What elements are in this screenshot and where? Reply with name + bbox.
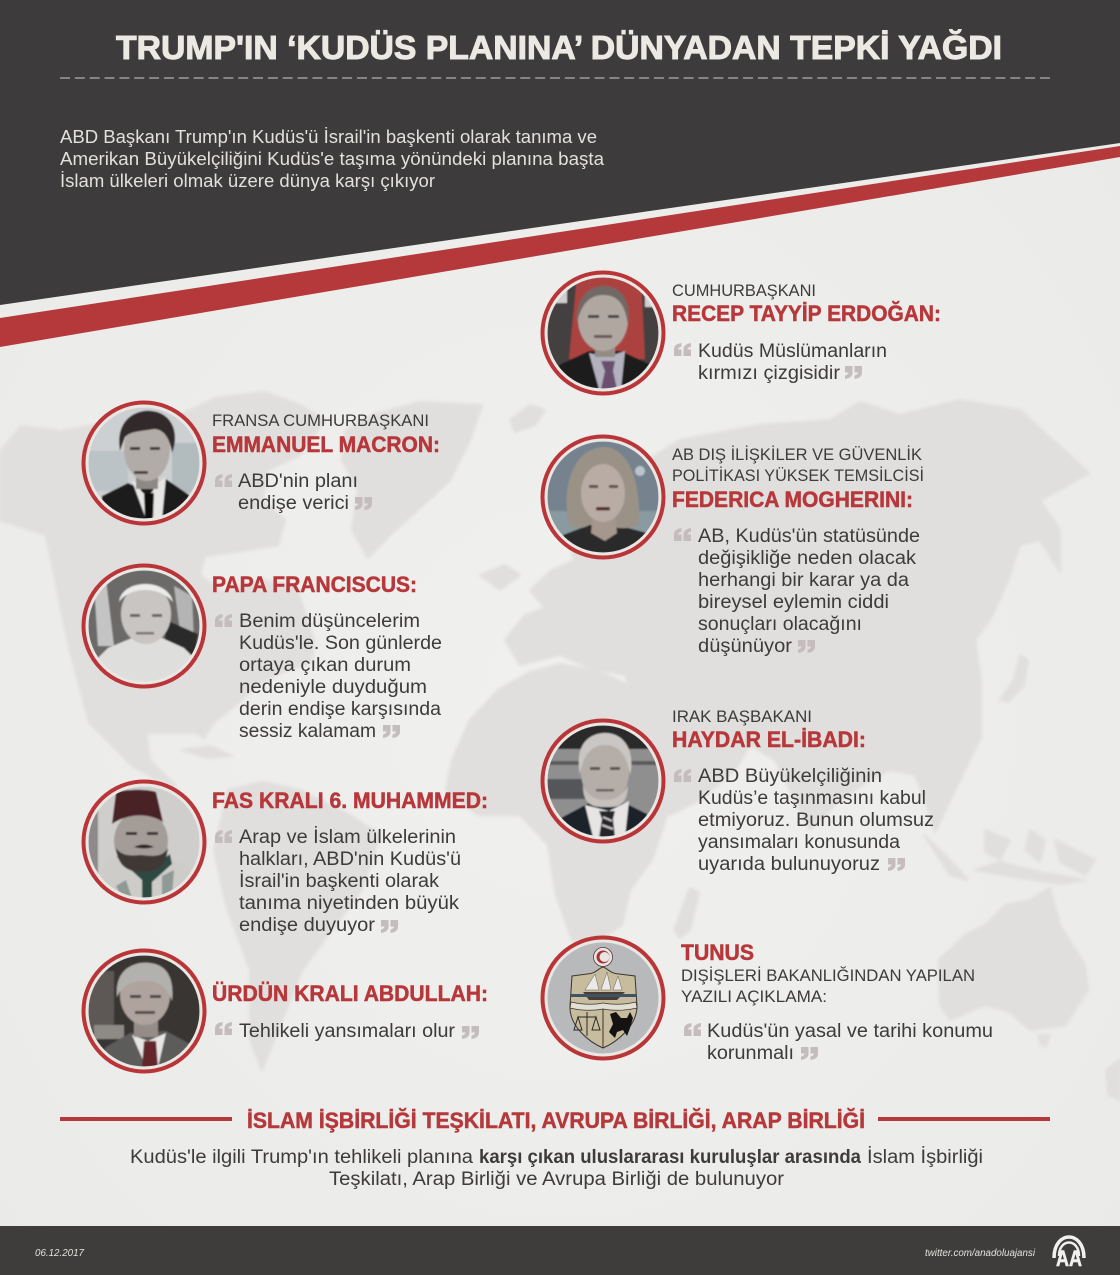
name: Mogherini: FEDERICA MOGHERINI: — [672, 487, 913, 512]
quote: Urdun Krali: Tehlikeli yansımaları olur — [239, 1021, 456, 1042]
title: TRUMP'IN ‘KUDÜS PLANINA’ DÜNYADAN TEPKİ YAĞDI — [116, 29, 1002, 66]
quote: Papa Franciscus: Benim düşüncelerim — [239, 611, 420, 632]
quote: Fas Krali: tanıma niyetinden büyük — [239, 893, 460, 914]
quote: Erdogan: Kudüs Müslümanların — [698, 341, 887, 362]
quote: Papa Franciscus: ortaya çıkan durum — [239, 655, 411, 676]
quote: El-Ibadi: yansımaları konusunda — [698, 832, 900, 853]
logo: Anadolu Agency — [1054, 1237, 1084, 1271]
intro text: Amerikan Büyükelçiliğini Kudüs'e taşıma yönündeki planına başta — [60, 149, 605, 169]
quote: Fas Krali: halkları, ABD'nin Kudüs'ü — [239, 849, 461, 870]
quote: Mogherini — [674, 526, 920, 657]
name: El-Ibadi: HAYDAR EL-İBADI: — [672, 727, 866, 752]
text block: organisations — [130, 1147, 983, 1190]
text block: organisations: Teşkilatı, Arap Birliği ve Avrupa Birliği de bulunuyor — [329, 1169, 785, 1190]
panel: Papa Franciscus — [84, 566, 442, 742]
quote: El-Ibadi — [674, 766, 934, 875]
quote: Papa Franciscus: derin endişe karşısında — [239, 699, 441, 720]
quote: El-Ibadi: Kudüs’e taşınmasını kabul — [698, 788, 926, 809]
name: Tunus: TUNUS — [681, 940, 754, 965]
quote: El-Ibadi: etmiyoruz. Bunun olumsuz — [698, 810, 934, 831]
label: Mogherini title — [672, 445, 924, 485]
label: Tunus source — [681, 966, 975, 1006]
header dark band — [0, 0, 1120, 305]
quote: Tunus: Kudüs'ün yasal ve tarihi konumu — [707, 1021, 993, 1042]
quote: El-Ibadi: ABD Büyükelçiliğinin — [698, 766, 882, 787]
portrait: Macron — [84, 402, 204, 524]
name: Fas Krali: FAS KRALI 6. MUHAMMED: — [212, 788, 488, 813]
label: Tunus source: YAZILI AÇIKLAMA: — [681, 988, 827, 1006]
label: El-Ibadi title: IRAK BAŞBAKANI — [672, 708, 812, 726]
quote: Fas Krali — [215, 827, 461, 936]
quote: Erdogan — [674, 341, 887, 384]
footer bar — [0, 1226, 1120, 1275]
portrait: Mogherini — [542, 436, 664, 558]
panel: Erdogan — [542, 272, 941, 394]
quote: Macron: endişe verici — [238, 493, 349, 514]
name: Papa Franciscus: PAPA FRANCISCUS: — [212, 572, 417, 597]
quote: Fas Krali: Arap ve İslam ülkelerinin — [239, 827, 456, 848]
portrait: El-Ibadi — [542, 720, 664, 842]
quote: Papa Franciscus: Kudüs'le. Son günlerde — [239, 633, 442, 654]
panel: Mogherini — [542, 436, 924, 657]
intro text: ABD Başkanı Trump'ın Kudüs'ü İsrail'in başkenti olarak tanıma ve — [60, 127, 597, 147]
name: Macron: EMMANUEL MACRON: — [212, 432, 440, 457]
panel: El-Ibadi — [542, 708, 934, 875]
quote: Fas Krali: endişe duyuyor — [239, 915, 376, 936]
portrait: Pope — [84, 566, 204, 686]
text block: organisations: karşı çıkan uluslararası kuruluşlar arasında — [479, 1147, 861, 1168]
world map background — [0, 392, 1120, 1100]
name: Erdogan: RECEP TAYYİP ERDOĞAN: — [672, 301, 941, 326]
quote: Mogherini: herhangi bir karar ya da — [698, 570, 909, 591]
quote: Fas Krali: İsrail'in başkenti olarak — [239, 871, 440, 892]
quote: Papa Franciscus: nedeniyle duyduğum — [239, 677, 427, 698]
quote: Mogherini: bireysel eylemin ciddi — [698, 592, 889, 613]
quote: Papa Franciscus — [215, 611, 442, 742]
emblem: Tunisia coat of arms — [542, 938, 664, 1058]
intro text: İslam ülkeleri olmak üzere dünya karşı çıkıyor — [60, 171, 435, 191]
quote: Tunus — [684, 1021, 993, 1064]
quote: Papa Franciscus: sessiz kalamam — [239, 721, 376, 742]
quote: El-Ibadi: uyarıda bulunuyoruz — [698, 854, 880, 875]
panel: Tunus — [542, 938, 993, 1064]
section: international organisations — [60, 1108, 1050, 1190]
portrait: Erdogan — [542, 272, 664, 394]
heading: organisations: İSLAM İŞBİRLİĞİ TEŞKİLATI, AVRUPA BİRLİĞİ, ARAP BİRLİĞİ — [247, 1108, 865, 1133]
label: Erdogan title: CUMHURBAŞKANI — [672, 282, 816, 300]
label: Macron title: FRANSA CUMHURBAŞKANI — [212, 412, 429, 430]
name: Urdun Krali: ÜRDÜN KRALI ABDULLAH: — [212, 981, 488, 1006]
quote: Tunus: korunmalı — [707, 1043, 794, 1064]
social handle: twitter.com/anadoluajansi — [925, 1248, 1036, 1259]
label: Mogherini title: POLİTİKASI YÜKSEK TEMSİLCİSİ — [672, 466, 924, 485]
quote: Mogherini: AB, Kudüs'ün statüsünde — [698, 526, 920, 547]
date: 06.12.2017 — [35, 1248, 84, 1259]
logo: Anadolu Agency: AA — [1056, 1246, 1082, 1271]
quote: Erdogan: kırmızı çizgisidir — [698, 363, 841, 384]
portrait: King Mohammed VI — [84, 782, 204, 902]
label: Tunus source: DIŞİŞLERİ BAKANLIĞINDAN YAPILAN — [681, 966, 975, 985]
quote: Macron: ABD'nin planı — [238, 471, 358, 492]
panel: Fas Krali — [84, 782, 488, 936]
intro text — [60, 127, 605, 191]
label: Mogherini title: AB DIŞ İLİŞKİLER VE GÜVENLİK — [672, 445, 922, 464]
panel: Urdun Krali — [84, 950, 488, 1072]
quote: Mogherini: sonuçları olacağını — [698, 614, 862, 635]
portrait: King Abdullah — [84, 950, 204, 1072]
red diagonal stripe — [0, 146, 1120, 347]
text block: organisations: Kudüs'le ilgili Trump'ın tehlikeli planına — [130, 1147, 473, 1168]
quote: Mogherini: değişikliğe neden olacak — [698, 548, 917, 569]
panel: Macron — [84, 402, 440, 524]
quote: Mogherini: düşünüyor — [698, 636, 793, 657]
quote: Macron — [215, 471, 372, 514]
text block: organisations: İslam İşbirliği — [867, 1147, 983, 1168]
